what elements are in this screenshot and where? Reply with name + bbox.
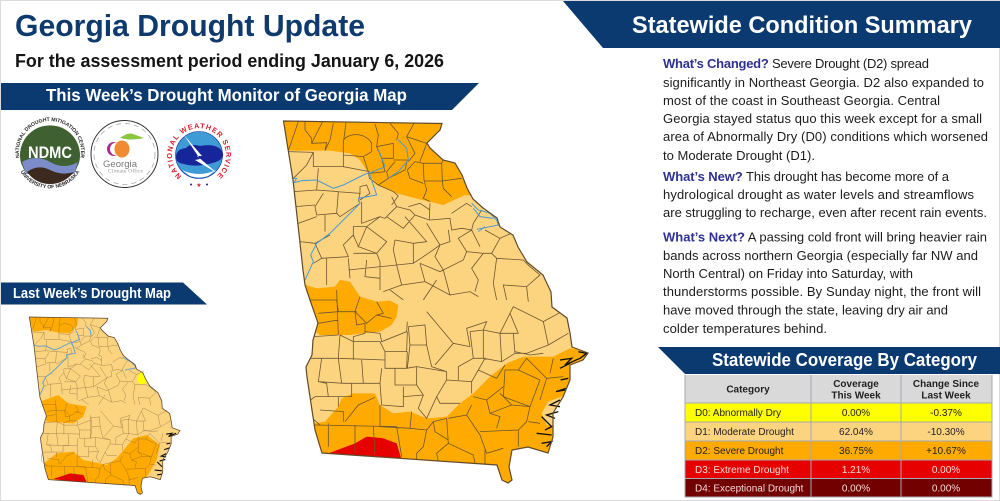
D0 region last week — [137, 372, 147, 384]
logo: NDMC: NATIONAL DROUGHT MITIGATION CENTER — [15, 117, 85, 158]
logo: Georgia Climate Office: Climate Office — [108, 168, 144, 174]
row D3 — [695, 465, 960, 476]
coastal marsh — [537, 352, 587, 447]
text block: what's changed: to Moderate Drought (D1). — [663, 148, 815, 163]
D2 regions last week — [28, 315, 160, 498]
table header: Coverage — [833, 379, 879, 390]
main map: this week's Georgia drought — [277, 117, 597, 490]
text block: what's changed: Georgia stayed status quo this week except for a small — [663, 111, 982, 126]
state outline — [284, 121, 588, 483]
text block: what's new: are struggling to recharge, even after recent rain events. — [663, 205, 987, 220]
banner: last week's map: Last Week’s Drought Map — [13, 286, 171, 302]
banner: this week's map — [1, 83, 479, 110]
table header: This Week — [831, 390, 881, 402]
county lines — [288, 122, 568, 465]
logo: Georgia Climate Office: Georgia — [103, 159, 138, 170]
banner: statewide condition summary — [563, 1, 1000, 48]
text block: what's next: thunderstorms possible. By Sunday night, the front will — [663, 284, 981, 299]
table: coverage by category — [685, 375, 992, 497]
text block: what's changed — [663, 56, 988, 163]
row D4: 0.00% — [842, 484, 870, 494]
logo: Georgia Climate Office — [91, 120, 158, 188]
D2 region: south and coast — [314, 348, 586, 482]
row D1: 62.04% — [839, 427, 873, 438]
row D2: 36.75% — [839, 446, 873, 457]
subtitle: For the assessment period ending January 6, 2026 — [15, 51, 444, 71]
text block: what's next — [663, 230, 987, 336]
D3 region last week — [54, 473, 87, 482]
table header: Category — [726, 384, 770, 396]
row D3: 1.21% — [842, 465, 870, 476]
text block: what's new — [663, 169, 987, 220]
row D0: D0: Abnormally Dry — [695, 408, 781, 419]
D2 region: southwest central — [300, 280, 398, 335]
logo: NDMC: NDMC — [28, 143, 72, 162]
text block: what's next: colder temperatures behind. — [663, 321, 827, 336]
row D3: D3: Extreme Drought — [695, 465, 789, 476]
table header: Last Week — [921, 390, 971, 402]
text block: what's new: hydrological drought as water levels and streamflows — [663, 187, 974, 202]
row D1 — [695, 427, 965, 438]
table header — [726, 379, 979, 402]
text block: what's next: have moved through the state, leaving dry air and — [663, 302, 948, 318]
banner: statewide coverage by category — [658, 347, 1000, 374]
row D4 — [695, 484, 960, 494]
row D0: -0.37% — [930, 408, 962, 419]
text block: what's changed: significantly in Northeast Georgia. D2 also expanded to — [663, 75, 984, 90]
text block: what's next: North Central) on Friday into Saturday, with — [663, 266, 913, 281]
banner: statewide condition summary: Statewide Condition Summary — [632, 12, 972, 39]
logo: NDMC — [15, 117, 85, 188]
row D2: +10.67% — [926, 446, 966, 457]
row D0: 0.00% — [842, 408, 870, 419]
D3 region: southwest border — [330, 436, 401, 458]
text block: what's changed: What’s Changed? Severe Drought (D2) spread — [663, 56, 929, 71]
logo: NDMC: UNIVERSITY OF NEBRASKA — [21, 170, 80, 188]
banner: this week's map: This Week’s Drought Monitor of Georgia Map — [46, 85, 407, 105]
text block: what's changed: most of the coast in Southeast Georgia. Central — [663, 93, 940, 108]
text block: what's next: What’s Next? A passing cold front will bring heavier rain — [663, 230, 987, 244]
text block: what's new: What’s New? This drought has become more of a — [663, 169, 950, 184]
row D4: D4: Exceptional Drought — [695, 484, 804, 494]
banner: statewide coverage by category: Statewide Coverage By Category — [712, 350, 977, 370]
title: Georgia Drought Update — [15, 8, 365, 43]
rivers — [292, 140, 498, 280]
row D4: 0.00% — [932, 484, 960, 494]
table header: Change Since — [913, 379, 979, 390]
row D1: D1: Moderate Drought — [695, 427, 794, 438]
small map: last week's Georgia drought — [28, 315, 180, 498]
text block: what's next: bands across northern Georgia (especially far NW and — [663, 248, 978, 263]
row D2: D2: Severe Drought — [695, 446, 784, 457]
row D0 — [695, 408, 962, 419]
row D1: -10.30% — [927, 427, 965, 438]
banner: last week's map — [1, 282, 207, 304]
text block: what's changed: area of Abnormally Dry (D0) conditions which worsened — [663, 129, 988, 144]
row D2 — [695, 446, 966, 457]
logo: National Weather Service: ★ — [196, 182, 202, 189]
logo: National Weather Service: NATIONAL WEATHER SERVICE — [167, 123, 231, 180]
row D3: 0.00% — [932, 465, 960, 476]
D2 region: north Georgia — [284, 122, 470, 205]
